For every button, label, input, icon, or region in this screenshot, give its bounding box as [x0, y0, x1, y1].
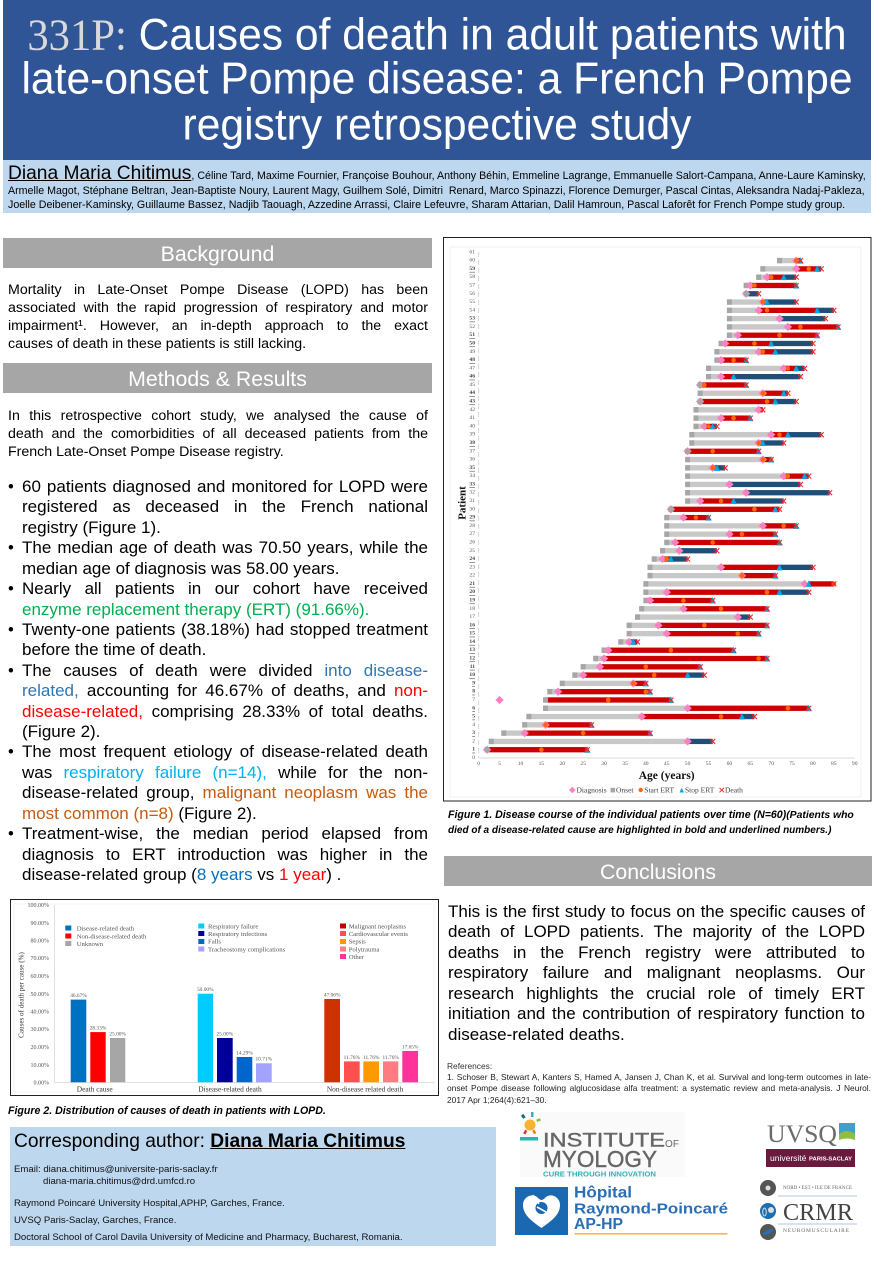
authors block: Armelle Magot, Stéphane Beltran, Jean-Baptiste Noury, Laurent Magy, Guilhem Solé, Dimitri Renard, Marco Spinazzi, Florence Demurger, Pascal Cintas, Aleksandra Nadaj-Pakleza,: [8, 185, 865, 197]
heading: Background: [3, 238, 432, 268]
patient 51: [727, 331, 820, 339]
y axis patient numbers: 21: [469, 581, 475, 587]
y axis patient numbers: 32: [469, 490, 475, 496]
y axis patient numbers: 8: [472, 689, 475, 695]
y axis patient numbers: 52: [469, 324, 475, 330]
y axis patient numbers: 49: [469, 349, 475, 355]
authors block: [3, 160, 871, 213]
x axis age labels: 65: [748, 761, 753, 767]
logo: CRMR Neuromusculaire: CRMR: [783, 1200, 853, 1226]
x axis age labels: [477, 761, 858, 767]
y axis: 10.00%: [30, 1063, 49, 1069]
heading: Background: Background: [161, 242, 274, 266]
patient 26: [664, 538, 783, 547]
patient 34: [685, 472, 811, 480]
patient 30: [667, 505, 782, 513]
patient 31: [685, 497, 786, 505]
y axis patient numbers: 9: [472, 680, 475, 686]
patient 11: [581, 663, 703, 671]
x axis age labels: 20: [560, 761, 565, 767]
conclusions text: This is the first study to focus on the specific causes of: [448, 902, 865, 921]
results bullet list: registry (Figure 1).: [22, 518, 161, 537]
patient 43: [696, 397, 799, 406]
y axis patient numbers: 29: [469, 515, 475, 521]
patient 57: [744, 281, 799, 290]
y axis patient numbers: 42: [469, 407, 475, 413]
y axis patient numbers: [469, 249, 475, 761]
y axis patient numbers: 41: [469, 415, 475, 421]
patient 19: [643, 596, 716, 605]
title banner: [3, 0, 871, 160]
conclusions text: death of LOPD patients. The majority of the LOPD: [448, 922, 865, 941]
patient 47: [706, 364, 807, 373]
legend: death cause: Non-disease-related death: [77, 934, 147, 940]
logo: Hopital Raymond-Poincare AP-HP: Raymond-Poincaré: [574, 1200, 728, 1218]
y axis patient numbers: 6: [472, 705, 475, 711]
x axis age labels: 15: [539, 761, 544, 767]
patient 8: [547, 688, 653, 696]
y axis patient numbers: 18: [469, 606, 475, 612]
results bullet list: disease-related group, malignant neoplasm was the: [22, 783, 428, 802]
corresponding author contact details: diana-maria.chitimus@drd.umfcd.ro: [43, 1176, 195, 1187]
logo: CRMR Neuromusculaire: NORD • EST • ILE DE FRANCE: [783, 1186, 852, 1191]
value labels: 11.76%: [382, 1055, 399, 1061]
x axis age labels: 40: [643, 761, 649, 767]
y axis patient numbers: 44: [469, 390, 475, 396]
results bullet list: most common (n=8) (Figure 2).: [22, 804, 257, 823]
y axis patient numbers: 40: [469, 423, 475, 429]
legend: disease-related: [198, 924, 286, 954]
y axis: 80.00%: [30, 938, 49, 944]
legend: non-disease related: Cardiovascular events: [349, 931, 408, 938]
y axis patient numbers: 56: [469, 291, 475, 297]
patient 48: [714, 356, 749, 364]
patient 27: [664, 530, 778, 538]
results bullet list: The median age of death was 70.50 years, while the: [22, 538, 428, 557]
methods text: death and the comorbidities of all deceased patients from the: [8, 426, 428, 442]
results bullet list: Nearly all patients in our cohort have received: [22, 579, 428, 598]
patient 56: [742, 290, 761, 298]
y axis patient numbers: 50: [469, 340, 475, 346]
logo: Hopital Raymond-Poincare AP-HP: [515, 1185, 728, 1235]
corresponding author box: [10, 1127, 496, 1246]
background text: causes of death in these patients is still lacking.: [8, 336, 306, 352]
legend: disease-related: Respiratory failure: [208, 924, 258, 930]
legend: non-disease related: Malignant neoplasms: [349, 924, 406, 930]
title banner: late-onset Pompe disease: a French Pompe: [21, 54, 853, 104]
patient 53: [727, 314, 828, 323]
x axis age labels: 5: [498, 761, 501, 767]
patient 52: [727, 323, 841, 331]
y axis patient numbers: 55: [469, 299, 475, 305]
y axis patient numbers: 14: [469, 639, 475, 645]
y axis patient numbers: 1: [472, 747, 475, 753]
patient 16: [627, 621, 770, 630]
figure 1: patient timeline chart: [443, 237, 872, 802]
y axis: 100.00%: [28, 903, 49, 909]
patient 1: [483, 746, 590, 754]
patient 24: [652, 555, 690, 563]
x axis age labels: 30: [601, 761, 607, 767]
figure 1 caption: died of a disease-related cause are highlighted in bold and underlined numbers.): [448, 825, 831, 836]
y axis patient numbers: 57: [469, 282, 475, 288]
y axis patient numbers: 59: [469, 266, 475, 272]
y axis: 30.00%: [30, 1027, 49, 1033]
y axis patient numbers: 11: [470, 664, 475, 670]
logo: CRMR Neuromusculaire: NEUROMUSCULAIRE: [783, 1228, 850, 1234]
background text: associated with the rapid progression of respiratory and motor: [8, 300, 428, 316]
y axis patient numbers: 37: [469, 448, 475, 454]
value labels: 25.00%: [216, 1032, 234, 1038]
results bullet list: •: [8, 580, 14, 598]
legend: disease-related: Falls: [208, 939, 221, 946]
patient 17: [635, 613, 753, 621]
patient 58: [756, 273, 799, 281]
results bullet list: registered as deceased in the French national: [22, 497, 428, 516]
patient 18: [639, 605, 770, 613]
y axis: 90.00%: [30, 921, 49, 927]
legend: death cause: Unknown: [77, 941, 104, 948]
legend: disease-related: Respiratory infections: [208, 931, 268, 938]
patient 4: [522, 721, 595, 729]
patient 20: [643, 588, 811, 596]
patient 12: [593, 654, 770, 663]
corresponding author contact details: Raymond Poincaré University Hospital,APHP, Garches, France.: [14, 1198, 285, 1209]
logo: UVSQ Universite Paris-Saclay: université: [770, 1153, 807, 1163]
corresponding author box: Corresponding author: Diana Maria Chitimus: [14, 1131, 405, 1152]
legend: non-disease related: [340, 924, 408, 961]
category labels: Non-disease related death: [327, 1084, 403, 1094]
logo: CRMR Neuromusculaire: [760, 1180, 857, 1240]
logo: Institute of Myology: INSTITUTE: [543, 1130, 665, 1152]
corresponding author contact details: UVSQ Paris-Saclay, Garches, France.: [14, 1215, 176, 1226]
results bullet list: (Figure 2).: [22, 722, 100, 741]
corresponding author contact details: Doctoral School of Carol Davila University of Medicine and Pharmacy, Bucharest, Romania.: [14, 1232, 403, 1243]
value labels: 28.33%: [90, 1026, 107, 1032]
results bullet list: Twenty-one patients (38.18%) had stopped treatment: [22, 620, 428, 639]
patient 38: [689, 439, 786, 447]
x axis age labels: 70: [768, 761, 774, 767]
chart legend: Start ERT: [644, 786, 674, 794]
y axis patient numbers: 27: [469, 531, 475, 537]
y axis patient numbers: 17: [469, 614, 475, 620]
patient 55: [727, 298, 799, 306]
heading: Conclusions: Conclusions: [600, 860, 716, 884]
results bullet list: 60 patients diagnosed and monitored for LOPD were: [22, 477, 428, 496]
y axis patient numbers: 39: [469, 432, 475, 438]
legend: non-disease related: Polytrauma: [349, 946, 380, 954]
value labels: 10.71%: [255, 1056, 273, 1062]
patient 46: [706, 373, 803, 381]
bars: disease-related death: [198, 994, 272, 1082]
results bullet list: •: [8, 621, 14, 639]
category labels: Disease-related death: [198, 1084, 262, 1094]
patient 36: [685, 455, 774, 464]
y axis patient numbers: 61: [469, 249, 475, 255]
patient 29: [664, 513, 712, 522]
y axis patient numbers: 26: [469, 540, 475, 546]
results bullet list: Treatment-wise, the median period elapsed from: [22, 824, 428, 843]
results bullet list: The causes of death were divided into disease-: [22, 661, 428, 680]
results bullet list: •: [8, 478, 14, 496]
y axis patient numbers: 31: [469, 498, 475, 504]
figure 1 caption: Figure 1. Disease course of the individual patients over time (N=60)(Patients who: [448, 809, 854, 821]
conclusions text: initiation and the contribution of respiratory function to: [448, 1004, 865, 1023]
x axis title: Age (years): [639, 770, 695, 782]
patient 33: [685, 480, 803, 489]
y axis patient numbers: 53: [469, 316, 475, 322]
figure 2 caption: Figure 2. Distribution of causes of death in patients with LOPD.: [8, 1105, 326, 1117]
y axis patient numbers: 25: [469, 548, 475, 554]
y axis patient numbers: 45: [469, 382, 475, 388]
y axis patient numbers: 58: [469, 274, 475, 280]
y axis patient numbers: 54: [469, 307, 475, 313]
y axis: 70.00%: [30, 956, 49, 962]
y axis patient numbers: 51: [469, 332, 475, 338]
x axis age labels: 25: [580, 761, 586, 767]
references: 1. Schoser B, Stewart A, Kanters S, Hamed A, Jansen J, Chan K, et al. Survival and long-term outcomes in late-: [447, 1072, 871, 1082]
heading: Methods & Results: Methods & Results: [128, 367, 307, 391]
y axis patient numbers: 34: [469, 473, 475, 479]
results bullet list: diagnosis to ERT introduction was higher in the: [22, 845, 428, 864]
references: 2017 Apr 1;264(4):621–30.: [447, 1095, 547, 1105]
x axis age labels: 75: [789, 761, 795, 767]
background text: impairment¹. However, an in-depth approach to the exact: [8, 318, 428, 334]
y axis patient numbers: 36: [469, 457, 475, 463]
results bullet list: •: [8, 825, 14, 843]
authors block: Joelle Deibener-Kaminsky, Guillaume Bassez, Nadjib Taouagh, Azzedine Arrassi, Claire Lefeuvre, Sharam Attarian, Dalil Hamroun, Pascal Laforêt for French Pompe study group.: [8, 199, 845, 211]
references: onset Pompe disease following alglucosidase alfa treatment: a systematic review and meta-analysis. J Neurol.: [447, 1083, 871, 1093]
x axis age labels: 45: [664, 761, 670, 767]
patient 49: [714, 348, 815, 356]
patient 3: [501, 729, 653, 737]
patient 22: [647, 571, 778, 580]
patient 39: [689, 431, 824, 439]
conclusions text: deaths in the French registry were attributed to: [448, 943, 865, 962]
results bullet list: related, accounting for 46.67% of deaths, and non-: [22, 681, 428, 700]
results bullet list: enzyme replacement therapy (ERT) (91.66%).: [22, 600, 369, 619]
patient 44: [698, 389, 790, 397]
legend: non-disease related: Other: [349, 954, 365, 961]
x axis age labels: 55: [706, 761, 712, 767]
methods text: French Late-Onset Pompe Disease registry.: [8, 444, 284, 460]
logo: Institute of Myology: MYOLOGY: [543, 1146, 657, 1172]
axes: [479, 252, 855, 758]
results bullet list: was respiratory failure (n=14), while for the non-: [22, 763, 428, 782]
x axis age labels: 10: [518, 761, 524, 767]
y axis patient numbers: 43: [469, 398, 475, 404]
conclusions text: respiratory failure and malignant neoplasms. Our: [448, 963, 865, 982]
legend: non-disease related: Sepsis: [349, 939, 366, 946]
references: References:: [447, 1061, 492, 1071]
figure 1 caption: [448, 809, 854, 836]
y axis patient numbers: 13: [469, 647, 475, 653]
results bullet list: The most frequent etiology of disease-related death: [22, 742, 428, 761]
x axis age labels: 60: [727, 761, 732, 767]
patient 60: [777, 256, 804, 265]
patient 40: [693, 422, 719, 431]
logo: Institute of Myology: [520, 1112, 679, 1178]
conclusions text: [448, 902, 865, 1044]
chart legend: Death: [725, 786, 743, 794]
references: [447, 1061, 871, 1105]
y axis patient numbers: 12: [469, 656, 475, 662]
conclusions text: research highlights the crucial role of timely ERT: [448, 984, 865, 1003]
corresponding author contact details: [14, 1164, 403, 1243]
x axis age labels: 50: [685, 761, 691, 767]
results bullet list: [8, 477, 428, 884]
heading: Conclusions: [444, 856, 872, 886]
bars: death cause: [71, 1000, 125, 1082]
results bullet list: •: [8, 743, 14, 761]
results bullet list: disease-related group (8 years vs 1 year) .: [22, 865, 341, 884]
x axis age labels: 35: [622, 761, 628, 767]
y axis patient numbers: 60: [469, 258, 475, 264]
patient bars: [483, 256, 841, 754]
logo: UVSQ Universite Paris-Saclay: UVSQ: [767, 1121, 837, 1148]
x axis age labels: 0: [477, 761, 480, 767]
y axis patient numbers: 24: [469, 556, 475, 562]
value labels: 17.65%: [402, 1044, 419, 1050]
title banner: 331P: Causes of death in adult patients with: [27, 10, 847, 60]
patient 21: [643, 580, 836, 588]
patient 10: [572, 671, 707, 679]
y axis: 40.00%: [30, 1010, 49, 1016]
bars: non-disease related death: [324, 999, 418, 1082]
x axis age labels: 80: [810, 761, 816, 767]
logo: UVSQ Universite Paris-Saclay: PARIS-SACLAY: [809, 1156, 853, 1162]
chart legend: Stop ERT: [685, 786, 715, 794]
y axis patient numbers: 19: [469, 598, 475, 604]
patient 14: [618, 638, 640, 646]
y axis patient numbers: 30: [469, 506, 475, 512]
y axis patient numbers: 4: [472, 722, 475, 728]
y axis patient numbers: 38: [469, 440, 475, 446]
x axis age labels: 90: [852, 761, 858, 767]
patient 9: [560, 679, 649, 688]
y axis: [28, 903, 434, 1086]
methods text: [8, 408, 428, 460]
heading: Methods & Results: [3, 363, 432, 393]
y axis patient numbers: 15: [469, 631, 475, 637]
category labels: Death cause: [77, 1084, 113, 1094]
patient 28: [664, 522, 799, 530]
value labels: 50.00%: [197, 987, 214, 993]
y axis patient numbers: 3: [472, 730, 475, 736]
patient 25: [660, 547, 719, 555]
patient 37: [683, 447, 762, 455]
legend: death cause: Disease-related death: [77, 926, 135, 932]
y axis patient numbers: 48: [469, 357, 475, 363]
patient 23: [647, 563, 815, 571]
patient 45: [696, 381, 749, 389]
y axis title: Patient: [456, 486, 468, 520]
y axis: 50.00%: [30, 992, 49, 998]
background text: Mortality in Late-Onset Pompe Disease (LOPD) has been: [8, 282, 428, 298]
results bullet list: median age of diagnosis was 58.00 years.: [22, 559, 340, 578]
value labels: 14.29%: [236, 1050, 253, 1056]
value labels: 46.67%: [70, 993, 87, 999]
background text: [8, 282, 428, 352]
results bullet list: before the time of death.: [22, 640, 206, 659]
y axis title: Causes of death per cause (%): [18, 952, 26, 1038]
logo: Hopital Raymond-Poincare AP-HP: Hôpital: [574, 1185, 632, 1202]
patient 42: [693, 406, 765, 414]
y axis: 20.00%: [30, 1045, 49, 1051]
value labels: 11.76%: [344, 1055, 361, 1061]
methods text: In this retrospective cohort study, we analysed the cause of: [8, 408, 428, 424]
y axis patient numbers: 20: [469, 589, 475, 595]
patient 2: [489, 737, 715, 746]
y axis patient numbers: 0: [472, 755, 475, 761]
results bullet list: •: [8, 539, 14, 557]
patient 15: [627, 630, 762, 638]
value labels: [70, 987, 419, 1062]
logo: Institute of Myology: OF: [665, 1139, 679, 1150]
logo: Institute of Myology: CURE THROUGH INNOVATION: [543, 1170, 656, 1178]
patient 59: [760, 265, 824, 273]
y axis: 0.00%: [34, 1080, 49, 1086]
legend: death cause: [65, 926, 147, 948]
patient 41: [693, 414, 753, 422]
patient 5: [526, 712, 757, 721]
patient 6: [543, 704, 812, 712]
results bullet list: •: [8, 662, 14, 680]
patient 32: [685, 489, 832, 497]
y axis patient numbers: 47: [469, 365, 475, 371]
patient 54: [727, 306, 836, 314]
value labels: 47.06%: [324, 992, 341, 998]
patient 13: [602, 646, 737, 654]
patient 50: [719, 339, 815, 348]
figure 2: bar chart of causes of death: [10, 899, 439, 1096]
chart legend: [569, 786, 743, 794]
chart legend: Onset: [616, 786, 634, 794]
y axis patient numbers: 46: [469, 374, 475, 380]
chart legend: Diagnosis: [576, 786, 607, 794]
y axis patient numbers: 2: [472, 738, 475, 744]
y axis patient numbers: 35: [469, 465, 475, 471]
results bullet list: disease-related, comprising 28.33% of total deaths.: [22, 702, 428, 721]
x axis age labels: 85: [831, 761, 837, 767]
y axis: 60.00%: [30, 974, 49, 980]
y axis patient numbers: 10: [469, 672, 475, 678]
y axis patient numbers: 23: [469, 564, 475, 570]
y axis patient numbers: 33: [469, 481, 475, 487]
title banner: registry retrospective study: [183, 100, 691, 150]
value labels: 11.76%: [363, 1055, 380, 1061]
logo: Hopital Raymond-Poincare AP-HP: AP-HP: [574, 1216, 623, 1233]
legend: disease-related: Tracheostomy complications: [208, 946, 286, 954]
y axis patient numbers: 16: [469, 622, 475, 628]
y axis patient numbers: 22: [469, 573, 475, 579]
authors block: Diana Maria Chitimus, Céline Tard, Maxime Fournier, Françoise Bouhour, Anthony Béhin, Emmeline Lagrange, Emmanuelle Salort-Campana, Anne-Laure Kaminsky,: [8, 163, 866, 184]
y axis patient numbers: 5: [472, 714, 475, 720]
category labels: [77, 1084, 403, 1094]
logo: UVSQ Universite Paris-Saclay: [766, 1121, 855, 1167]
patient 7: [495, 696, 674, 704]
conclusions text: disease-related deaths.: [448, 1025, 625, 1044]
patient 35: [685, 464, 728, 472]
y axis patient numbers: 7: [472, 697, 475, 703]
value labels: 25.00%: [109, 1032, 127, 1038]
corresponding author contact details: Email: diana.chitimus@universite-paris-saclay.fr: [14, 1164, 218, 1175]
y axis patient numbers: 28: [469, 523, 475, 529]
